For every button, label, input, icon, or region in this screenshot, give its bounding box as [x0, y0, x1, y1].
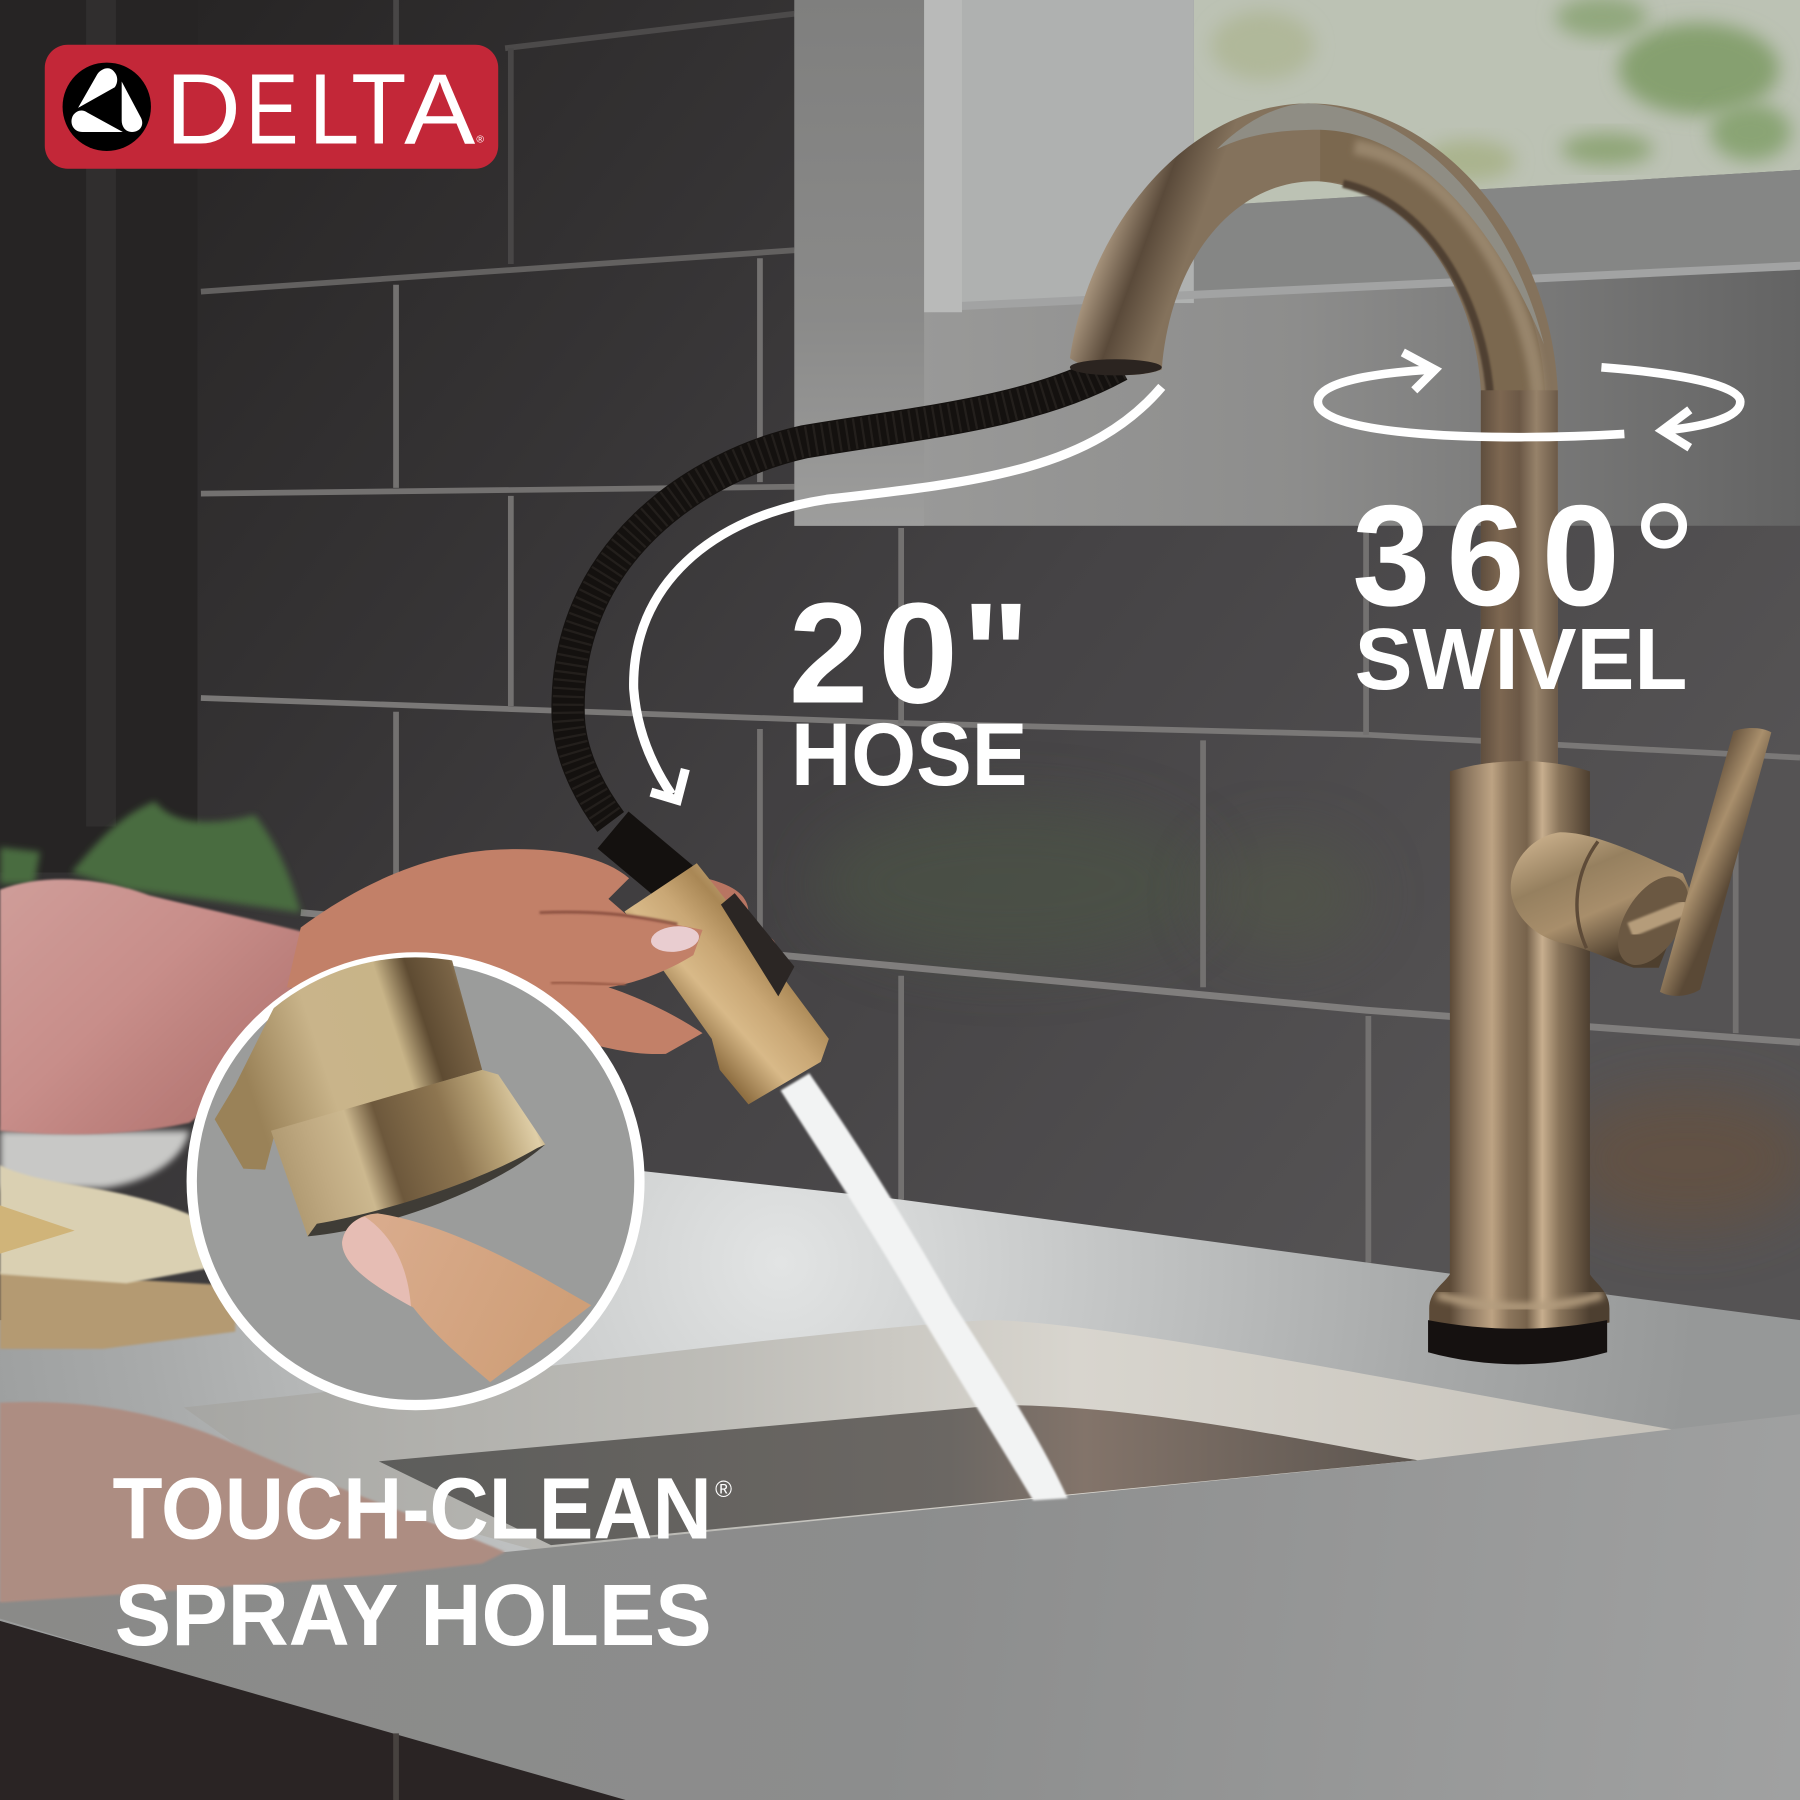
label: 20 inch hose [789, 574, 1030, 804]
Delta logo badge [45, 45, 498, 169]
cabinet below counter [0, 1621, 626, 1800]
bowl, cheese and cutting board [0, 1131, 235, 1349]
arrow: 360 swivel [1318, 352, 1740, 448]
wordmark: ® [476, 134, 484, 145]
faucet [287, 103, 1771, 1500]
wordmark: T [351, 54, 406, 165]
handle arm [1511, 832, 1703, 977]
water stream [781, 1073, 1068, 1500]
wordmark [165, 54, 484, 165]
label: touch-clean spray holes [113, 1460, 732, 1664]
wordmark: D [165, 54, 241, 165]
label: 360 swivel [1352, 469, 1697, 708]
label: 360 swivel: 0 [1542, 476, 1620, 636]
lower hand on counter [0, 1402, 505, 1603]
logo mark [63, 63, 151, 151]
label: 360 swivel: 6 [1446, 476, 1524, 636]
left column [0, 0, 197, 872]
label: 360 swivel: 3 [1352, 476, 1430, 636]
lettuce [0, 801, 301, 913]
hose [568, 365, 1119, 822]
label: 20 inch hose: 20" [789, 574, 1030, 734]
label: touch-clean spray holes: SPRAY HOLES [115, 1567, 712, 1664]
sprayer collar [613, 830, 677, 884]
black base ring [1428, 1320, 1607, 1364]
label: touch-clean spray holes: TOUCH-CLEAN [113, 1460, 712, 1557]
spout arch [1070, 103, 1558, 769]
arrow: 20 inch hose [634, 387, 1162, 800]
handle lever [1660, 728, 1771, 996]
front counter [0, 1414, 1800, 1800]
label: 360 swivel: ° [1631, 469, 1697, 653]
label: 360 swivel: SWIVEL [1355, 611, 1688, 708]
finger pressing nozzle [342, 1213, 591, 1382]
upper hand holding sprayer [287, 849, 703, 1054]
fingertips behind sprayer [706, 878, 777, 959]
countertop [0, 1169, 1800, 1800]
label: 20 inch hose: HOSE [791, 704, 1027, 804]
sprayer wand [624, 863, 829, 1104]
arm in pink sleeve [0, 879, 304, 1134]
wordmark: E [246, 54, 298, 165]
fingernail [650, 924, 700, 954]
inset: touch-clean spray holes [192, 953, 639, 1405]
wordmark: A [404, 54, 476, 165]
nozzle [215, 953, 545, 1236]
label: touch-clean spray holes: ® [715, 1476, 732, 1502]
wordmark: L [309, 54, 359, 165]
faucet body [1428, 761, 1609, 1364]
sink rim [184, 1320, 1671, 1561]
sink basin [379, 1405, 1418, 1545]
window wall panel [794, 0, 1800, 526]
